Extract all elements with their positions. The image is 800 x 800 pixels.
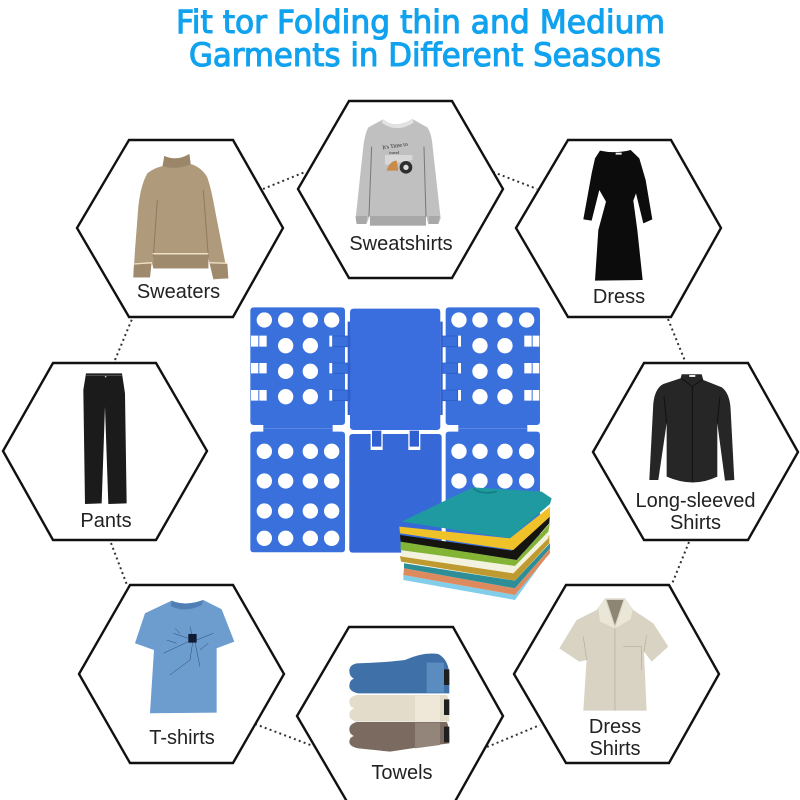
panel: towels — [297, 627, 503, 800]
label: dress: Dress — [593, 286, 645, 308]
panel: t-shirts — [79, 585, 284, 763]
icon: long-sleeved shirt — [649, 374, 734, 482]
icon: sweatshirt — [356, 119, 441, 226]
board: centre bottom panel — [349, 434, 442, 553]
title: Garments in Different Seasons — [189, 36, 661, 74]
icon: dress shirt — [559, 598, 668, 711]
icon: t-shirt — [135, 600, 234, 713]
folding board — [250, 307, 540, 553]
board: centre top panel — [350, 309, 440, 430]
board: sliding tabs — [333, 322, 458, 450]
label: sweaters: Sweaters — [137, 281, 220, 303]
board: right panel with holes — [446, 307, 540, 552]
label: towels: Towels — [371, 762, 433, 784]
icon: sweater — [133, 154, 228, 279]
icon: dress — [583, 150, 652, 281]
panel: pants — [3, 363, 207, 540]
icon: sweatshirt: travel — [389, 150, 400, 155]
panel: sweatshirts — [298, 101, 503, 278]
panel: dress shirts — [514, 585, 719, 763]
panel: sweaters — [77, 140, 283, 317]
label: long-sleeved shirts: Shirts — [670, 512, 721, 534]
icon: towels — [349, 653, 449, 752]
label: dress shirts: Shirts — [589, 738, 641, 760]
panel: long-sleeved shirts — [593, 363, 798, 540]
label: long-sleeved shirts — [635, 490, 756, 534]
label: dress shirts — [589, 716, 641, 760]
label: long-sleeved shirts: Long-sleeved — [635, 490, 756, 512]
dotted connectors between hexagons — [111, 172, 689, 747]
label: dress shirts: Dress — [589, 716, 641, 738]
icon: pants — [83, 373, 127, 504]
icon: sweatshirt: It's Time to — [382, 142, 408, 151]
panel: dress — [516, 140, 721, 317]
board: left panel with holes — [250, 307, 345, 552]
title — [176, 3, 665, 74]
label: t-shirts: T-shirts — [149, 727, 215, 749]
label: pants: Pants — [80, 510, 132, 532]
title: Fit tor Folding thin and Medium — [176, 3, 665, 41]
stack of folded shirts — [399, 487, 552, 600]
label: sweatshirts: Sweatshirts — [349, 233, 453, 255]
